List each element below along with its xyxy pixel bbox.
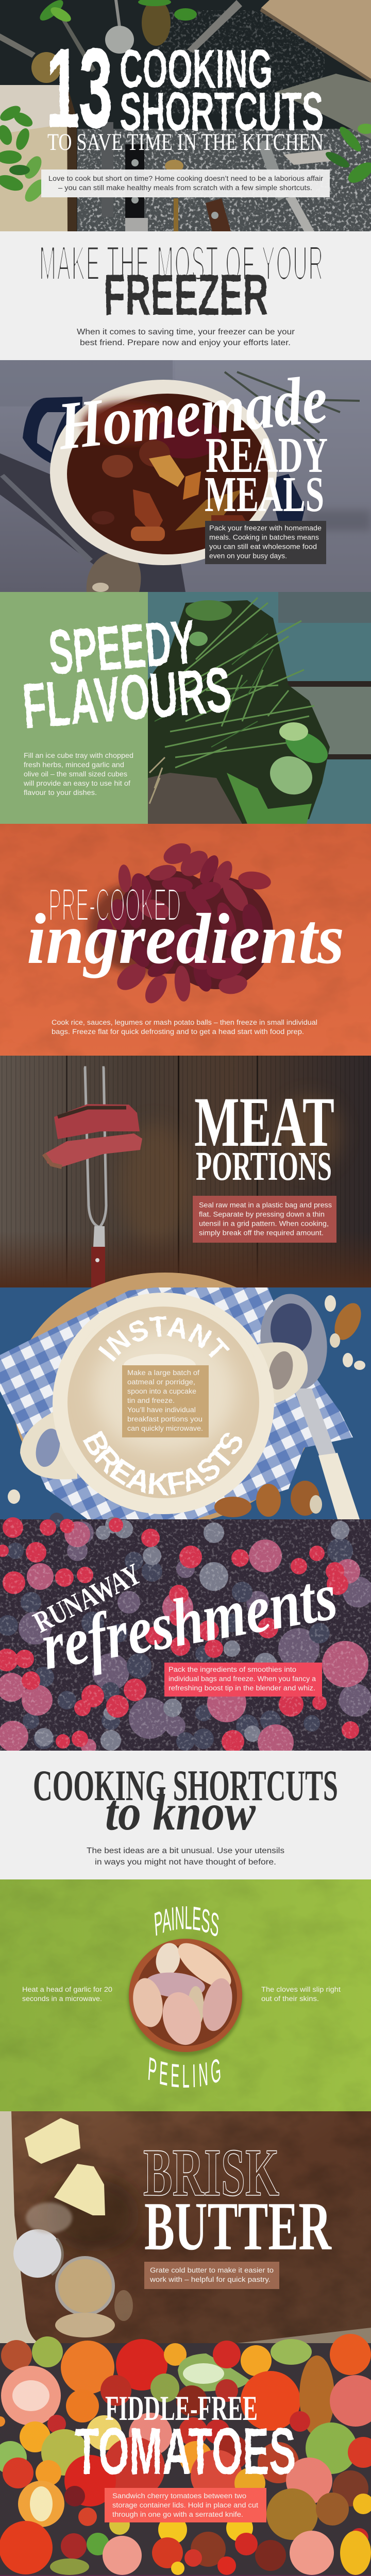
text box: you can still eat wholesome food (209, 543, 317, 550)
panel: instant breakfasts (0, 1273, 371, 1519)
text box: Pack your freezer with homemade (209, 524, 322, 532)
right text (261, 1986, 341, 2003)
text box: Pack the ingredients of smoothies into (168, 1666, 296, 1673)
text box (164, 1663, 322, 1697)
title: cooking shortcuts (120, 39, 324, 142)
text box: tin and freeze. (127, 1397, 175, 1404)
title: instant (curved): INSTANT (98, 1316, 230, 1362)
heading: to know: to know (105, 1784, 256, 1841)
icon: salt and sugar bowls (13, 2202, 133, 2337)
title: speedy flavours: FLAVOURS (20, 654, 234, 742)
title: pre-cooked: PRE-COOKED (48, 879, 181, 931)
text box: individual bags and freeze. When you fancy a (168, 1675, 316, 1683)
text: bags. Freeze flat for quick defrosting and to get a head start with food prep. (52, 1028, 304, 1036)
title: brisk: BRISK (143, 2134, 279, 2210)
title: ready meals (205, 428, 328, 522)
text box (144, 2262, 279, 2289)
icon: fresh herbs (148, 598, 333, 824)
icon: spoon (255, 1290, 360, 1519)
title: painless (curved): PAINLESS (155, 1906, 218, 1936)
left text: seconds in a microwave. (22, 1995, 102, 2003)
text box: meals. Cooking in batches means (209, 534, 319, 541)
text box: can quickly microwave. (127, 1425, 203, 1432)
icon: butter blocks (25, 2118, 105, 2215)
panel: painless peeling (0, 1879, 371, 2111)
text: in ways you might not have thought of before. (95, 1858, 276, 1867)
panel: speedy flavours (0, 592, 371, 824)
text box: You’ll have individual (127, 1406, 196, 1414)
text box: simply break off the required amount. (199, 1229, 324, 1236)
text box (193, 1196, 336, 1243)
title: breakfasts (curved): BREAKFASTS (82, 1431, 242, 1496)
icon: walnuts and oats (8, 1295, 366, 1517)
intro text box (41, 170, 330, 197)
text box: work with – helpful for quick pastry. (149, 2276, 271, 2283)
heading: freezer: FREEZER (104, 263, 268, 327)
intro text box: – you can still make healthy meals from scratch with a few simple shortcuts. (58, 184, 312, 192)
text (87, 1846, 284, 1867)
intro text box: Love to cook but short on time? Home cooking doesn’t need to be a laborious affair (48, 175, 324, 182)
panel: meat portions (0, 1056, 371, 1287)
panel: hero (0, 0, 371, 231)
text: olive oil – the small sized cubes (24, 770, 127, 778)
icon: thyme sprig (225, 372, 360, 443)
panel: homemade ready meals (0, 360, 371, 592)
title: runaway: RUNAWAY (28, 1557, 146, 1639)
text box: refreshing boost tip in the blender and whiz. (168, 1684, 315, 1692)
freezer text (77, 328, 295, 347)
right text: out of their skins. (261, 1995, 319, 2003)
title: meat portions (194, 1082, 334, 1189)
text: fresh herbs, minced garlic and (24, 761, 124, 769)
title: peeling (curved): PEELING (148, 2057, 221, 2088)
panel: simple slicing (0, 2575, 371, 2576)
freezer text: best friend. Prepare now and enjoy your efforts later. (80, 338, 291, 347)
text box: flat. Separate by pressing down a thin (199, 1211, 325, 1218)
left text: Heat a head of garlic for 20 (22, 1986, 112, 1993)
panel: brisk butter (0, 2111, 371, 2343)
panel: cooking shortcuts to know (0, 1751, 371, 1879)
icon: frozen berries (0, 1513, 371, 1760)
text: will provide an easy to use hit of (23, 779, 130, 787)
left text (22, 1986, 112, 2003)
icon: steak slices (44, 1104, 142, 1167)
icon: oatmeal bowl (20, 1293, 308, 1514)
panel: runaway refreshments (0, 1513, 371, 1760)
text (23, 752, 133, 796)
title: speedy flavours (20, 606, 234, 742)
text box: Sandwich cherry tomatoes between two (112, 2492, 246, 2500)
text: Fill an ice cube tray with chopped (24, 752, 133, 759)
icon: carving fork (84, 1067, 106, 1287)
text box (105, 2488, 266, 2522)
text box: storage container lids. Hold in place and cut (112, 2501, 258, 2509)
right text: The cloves will slip right (261, 1986, 341, 1993)
text box (122, 1365, 209, 1437)
text box (205, 521, 326, 564)
text box: Grate cold butter to make it easier to (150, 2266, 274, 2274)
title: speedy flavours: SPEEDY (46, 606, 198, 688)
text: Cook rice, sauces, legumes or mash potato balls – then freeze in small individual (52, 1019, 317, 1026)
text: flavour to your dishes. (24, 789, 97, 796)
title: 13: 13 (46, 25, 112, 150)
icon: kidney beans (88, 839, 273, 1007)
title: fiddle-free: FIDDLE-FREE (105, 2388, 258, 2428)
icon: stew pot (23, 380, 305, 565)
text box: through in one go with a serrated knife. (112, 2511, 243, 2518)
freezer text: When it comes to saving time, your freezer can be your (77, 328, 295, 336)
text box: oatmeal or porridge, (127, 1378, 195, 1386)
title: ingredients: ingredients (27, 899, 344, 979)
text box: Seal raw meat in a plastic bag and press (199, 1201, 332, 1209)
panel: fiddle-free tomatoes (0, 2334, 371, 2575)
text box: breakfast portions you (127, 1415, 203, 1423)
icon: heirloom tomatoes (0, 2334, 371, 2575)
panel: pre-cooked ingredients (0, 824, 371, 1056)
text box: utensil in a grid pattern. When cooking, (199, 1220, 329, 1227)
icon: garlic bowl (128, 1935, 243, 2056)
text box: even on your busy days. (209, 552, 287, 560)
text: The best ideas are a bit unusual. Use your utensils (87, 1846, 284, 1855)
heading: make the most of your: MAKE THE MOST OF YOUR (39, 237, 323, 291)
text (52, 1019, 317, 1036)
text box: spoon into a cupcake (127, 1387, 196, 1395)
panel: freezer intro (0, 231, 371, 360)
text box: Make a large batch of (127, 1369, 199, 1377)
